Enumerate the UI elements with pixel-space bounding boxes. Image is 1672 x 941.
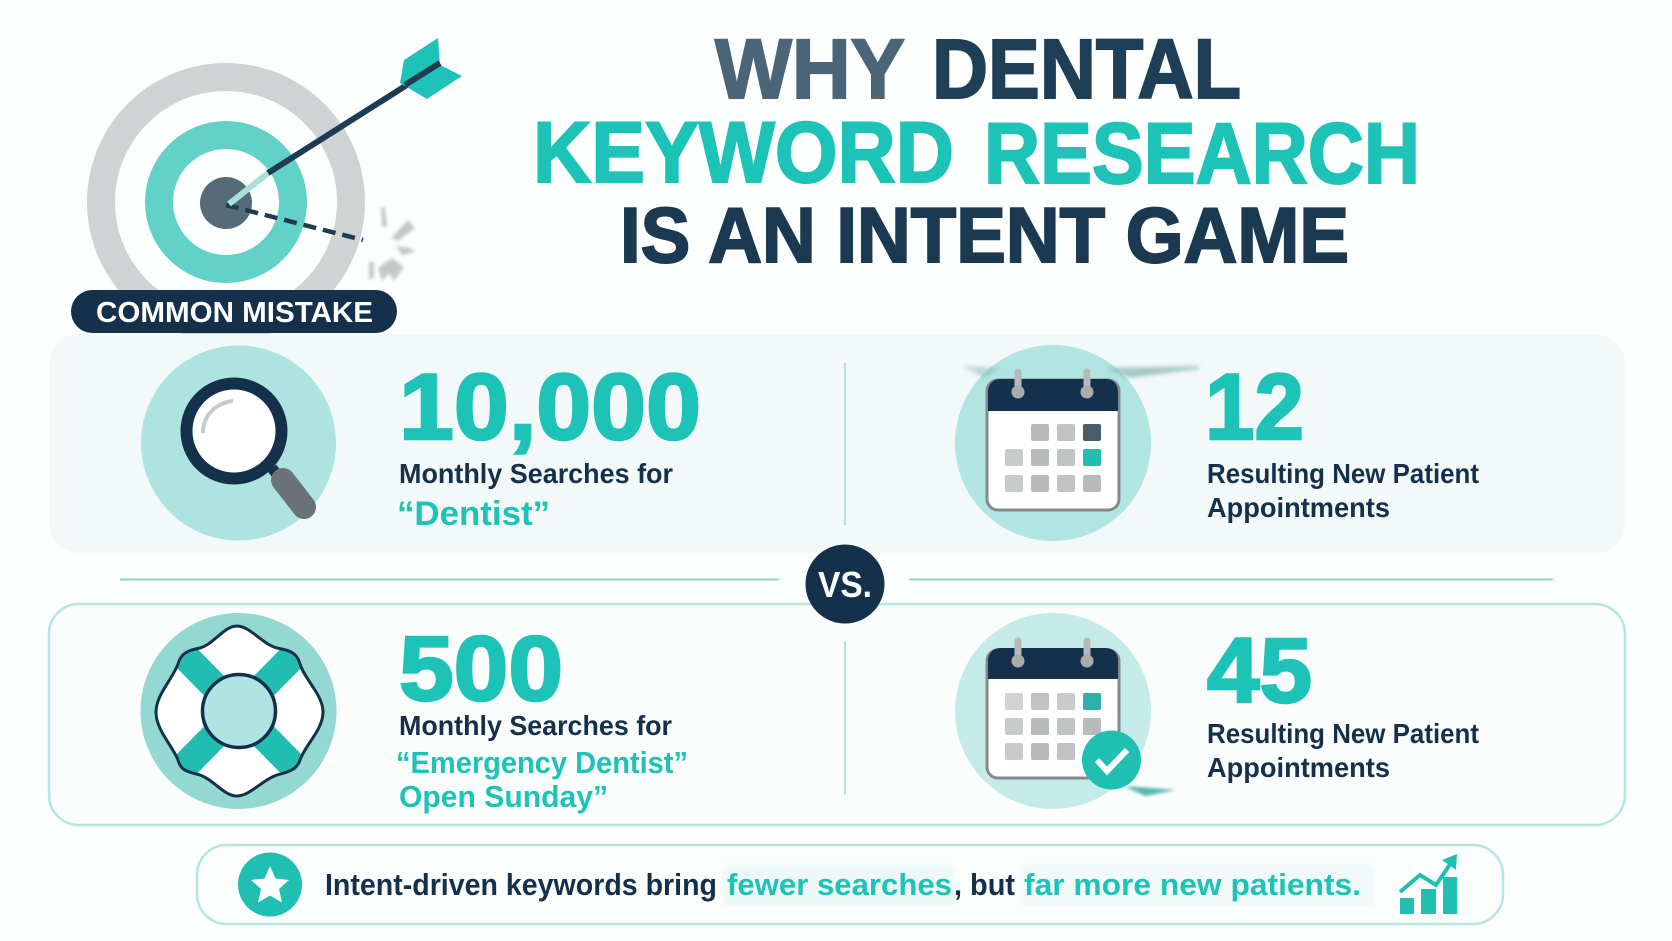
title: IS AN INTENT GAME (620, 191, 1349, 279)
stat: 45: 45 (1207, 620, 1312, 722)
icon: calendar with check (955, 613, 1176, 809)
label: resulting appointments (1207, 458, 1479, 523)
icon: target with arrow (101, 38, 462, 327)
title (533, 22, 1420, 279)
panel: generic keyword (49, 334, 1625, 553)
icon: star (238, 852, 302, 916)
takeaway text (325, 867, 1361, 902)
keyword: emergency dentist open sunday: Open Sunday” (399, 779, 608, 814)
highlight swatches (723, 864, 1375, 906)
takeaway text: far more new patients. (1024, 867, 1361, 902)
stat: 500: 500 (399, 618, 563, 720)
title: DENTAL (932, 22, 1241, 116)
label: resulting appointments: Resulting New Patient (1207, 718, 1479, 749)
label: resulting appointments: Appointments (1207, 752, 1390, 783)
panel: intent keyword (49, 604, 1625, 825)
label: monthly searches: Monthly Searches for (399, 458, 673, 489)
icon: growth chart (1400, 854, 1457, 914)
divider lines (120, 578, 1553, 580)
badge: common mistake (71, 290, 397, 333)
takeaway text: Intent-driven keywords bring (325, 867, 717, 902)
title: RESEARCH (984, 106, 1420, 202)
keyword: emergency dentist open sunday: “Emergency Dentist” (396, 745, 688, 780)
badge: vs (806, 544, 884, 624)
title: WHY (715, 22, 905, 116)
label: resulting appointments: Resulting New Patient (1207, 458, 1479, 489)
badge: common mistake: COMMON MISTAKE (96, 297, 373, 329)
title: KEYWORD (533, 105, 954, 201)
icon: life buoy (140, 613, 336, 809)
stat: 12: 12 (1205, 354, 1304, 459)
takeaway text: fewer searches (727, 867, 952, 902)
label: resulting appointments (1207, 718, 1479, 783)
label: resulting appointments: Appointments (1207, 492, 1390, 523)
badge: vs: VS. (818, 564, 872, 605)
icon: calendar (955, 345, 1199, 541)
callout: takeaway (197, 845, 1503, 924)
label: monthly searches: Monthly Searches for (399, 710, 672, 741)
takeaway text: , but (954, 867, 1015, 902)
keyword: dentist: “Dentist” (397, 495, 550, 533)
icon: magnifying glass (141, 346, 336, 540)
keyword: emergency dentist open sunday (396, 745, 688, 814)
stat: 10,000: 10,000 (399, 354, 701, 459)
